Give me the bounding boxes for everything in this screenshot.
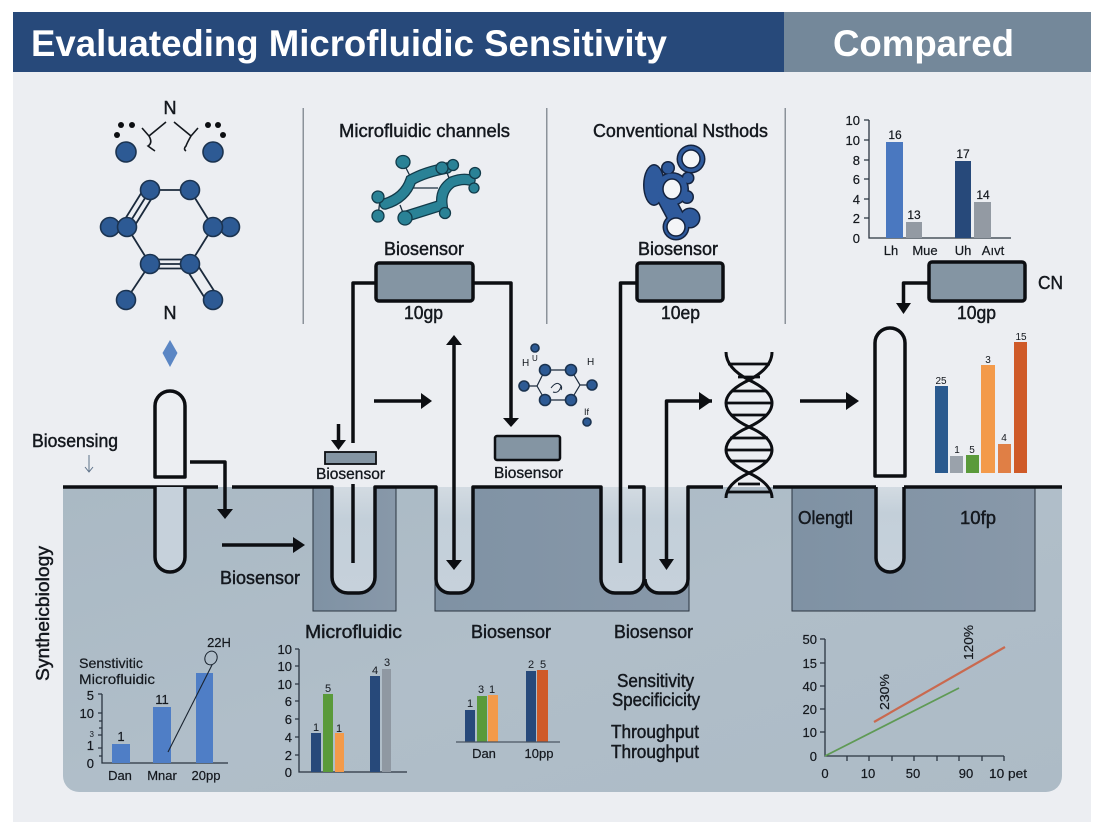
component: biosensor box one xyxy=(376,239,473,323)
bar chart: right middle: 3 xyxy=(985,355,991,366)
label: Biosensor xyxy=(638,239,718,259)
small molecule: If xyxy=(584,407,590,417)
arrow: box one right xyxy=(473,283,519,427)
bottom chart 2: 2 xyxy=(285,748,292,763)
capsule: right lower xyxy=(876,487,904,572)
top right bar chart: 4 xyxy=(853,192,860,207)
well: middle block xyxy=(435,488,689,611)
component: small sensor xyxy=(316,424,386,483)
arrow: to left well xyxy=(222,537,305,553)
green series xyxy=(825,688,959,756)
component: sensor block xyxy=(494,436,564,482)
line chart: 40 xyxy=(803,679,817,694)
bottom chart 1: 1 xyxy=(87,738,94,753)
bottom chart 1: Dan xyxy=(108,768,132,783)
line chart: 15 xyxy=(803,656,817,671)
heading: biosensor metrics: Biosensor xyxy=(614,622,693,642)
bottom chart 1: 1 xyxy=(117,729,125,744)
bottom chart 1: 0 xyxy=(87,756,94,771)
line chart: 10 xyxy=(861,766,875,781)
line chart: 20 xyxy=(803,702,817,717)
bottom chart 1 xyxy=(79,635,231,783)
chart heading line 2: Microfluidic xyxy=(79,671,155,687)
arrow: double headed xyxy=(446,335,462,570)
red series xyxy=(874,647,1005,722)
chart heading: Biosensor xyxy=(471,622,551,642)
bottom chart 2: 6 xyxy=(285,712,292,727)
bottom chart 1: 10 xyxy=(80,706,94,721)
top right bar chart: 13 xyxy=(907,208,921,222)
label: biosensing: Biosensing xyxy=(32,431,118,451)
bottom chart 3: 1 xyxy=(489,684,495,696)
component: biosensor box two xyxy=(637,239,723,323)
header banner xyxy=(13,12,1091,72)
arrow: channel up to DNA xyxy=(659,392,712,570)
small molecule: H xyxy=(587,357,594,368)
bottom chart 3: 3 xyxy=(478,684,484,696)
capsule: right upper xyxy=(875,328,905,476)
text block: metrics: Sensitivity xyxy=(617,671,694,691)
well: right block xyxy=(792,488,1035,611)
icon: blue folded molecule xyxy=(643,144,706,240)
top right bar chart: Aıvt xyxy=(982,243,1005,258)
bottom chart 3: 5 xyxy=(540,659,546,671)
arrow: top right box to capsule xyxy=(896,283,929,314)
icon: DNA helix xyxy=(726,352,772,498)
arrow: DNA to capsule xyxy=(800,392,859,410)
bar chart: right middle: 15 xyxy=(1015,332,1027,343)
text block: metrics xyxy=(611,671,700,762)
top right bar chart: 2 xyxy=(853,211,860,226)
bottom chart 2: 5 xyxy=(325,683,331,695)
bar chart: right middle xyxy=(935,332,1027,473)
text block: metrics: Throughput xyxy=(611,722,699,742)
label: N top: N xyxy=(164,98,176,118)
label: CN: CN xyxy=(1038,273,1063,293)
bottom chart 3: 10pp xyxy=(525,746,553,761)
bottom chart 1: 20pp xyxy=(192,768,220,783)
top right bar chart: 0 xyxy=(853,231,860,246)
line chart: 0 xyxy=(821,766,829,781)
bottom chart 2: 1 xyxy=(313,722,319,734)
label: rotated synthetic biology: Syntheicbiology xyxy=(33,546,53,681)
text block: metrics: Throughput xyxy=(611,742,699,762)
line chart: 230% xyxy=(877,674,892,710)
top right bar chart: 6 xyxy=(853,172,860,187)
chart heading: Senstivitic xyxy=(79,655,143,671)
value: 10gp xyxy=(404,303,443,323)
top right bar chart: Lh xyxy=(884,243,898,258)
top right bar chart: 10 xyxy=(846,133,860,148)
bar chart: right middle: 1 xyxy=(954,445,960,456)
value: 10ep xyxy=(661,303,700,323)
top right bar chart: 17 xyxy=(956,147,970,161)
bottom chart 3 xyxy=(456,622,560,761)
probe line xyxy=(351,484,355,563)
title: compared: Compared xyxy=(833,23,1014,64)
icon: teal channel molecule xyxy=(372,156,480,225)
line chart: 90 xyxy=(959,766,973,781)
label: Biosensor xyxy=(384,239,464,259)
line chart: 10 pet xyxy=(989,766,1027,781)
line chart: 120% xyxy=(961,625,976,660)
heading: microfluidic channels: Microfluidic channels xyxy=(339,121,510,141)
line chart xyxy=(803,625,1027,781)
bottom chart 3: 2 xyxy=(528,659,534,671)
well: left block xyxy=(313,488,396,611)
panel: lower substrate xyxy=(63,487,1062,792)
label: olengtl: Olengtl xyxy=(798,508,853,528)
bottom chart 2: 10 xyxy=(278,677,292,692)
line chart: 10 xyxy=(803,725,817,740)
label: biosensing xyxy=(32,431,118,472)
line chart: 50 xyxy=(803,632,817,647)
top right bar chart xyxy=(846,113,1011,258)
title: Evaluateding Microfluidic Sensitivity xyxy=(31,23,667,64)
top right bar chart: 14 xyxy=(976,188,990,202)
bottom chart 2: 10 xyxy=(278,659,292,674)
bottom chart 2: 0 xyxy=(285,765,292,780)
bar chart: right middle: 25 xyxy=(935,376,947,387)
bottom chart 1: 5 xyxy=(87,688,94,703)
chart heading: Microfluidic xyxy=(305,622,402,642)
top right bar chart: Uh xyxy=(955,243,971,258)
bottom chart 2: 10 xyxy=(278,642,292,657)
capsule: left lower xyxy=(155,487,185,572)
bottom chart 2: 3 xyxy=(384,657,390,669)
microfluidic channels and ground line xyxy=(63,487,1062,593)
label: Biosensor xyxy=(316,466,386,483)
top right bar chart: 8 xyxy=(853,153,860,168)
bottom chart 2 xyxy=(278,622,407,780)
bottom chart 2: 6 xyxy=(285,694,292,709)
text block: metrics: Specificicity xyxy=(612,690,700,710)
top right bar chart: Mue xyxy=(912,243,938,258)
connector: box two to channel xyxy=(620,283,637,563)
bottom chart 1: 11 xyxy=(155,692,169,707)
label: N bottom: N xyxy=(164,303,176,323)
label: biosensor substrate: Biosensor xyxy=(220,568,300,588)
arrow: horizontal mid xyxy=(374,393,432,409)
label: 10fp: 10fp xyxy=(960,508,996,528)
line chart: 0 xyxy=(810,749,817,764)
arrow down xyxy=(337,424,340,442)
bar chart: right middle: 5 xyxy=(969,445,975,456)
bar chart: right middle: 4 xyxy=(1001,433,1007,444)
capsule: left upper xyxy=(155,391,185,477)
bottom chart 3: 1 xyxy=(467,698,473,710)
connector: box one left xyxy=(353,283,376,443)
top right bar chart: 16 xyxy=(888,128,902,142)
heading: conventional methods: Conventional Nsthods xyxy=(593,121,768,141)
small molecule: H xyxy=(522,358,529,369)
bottom chart 3: Dan xyxy=(472,746,496,761)
bottom chart 1: Mnar xyxy=(147,768,177,783)
icon: diamond xyxy=(162,340,178,367)
molecule: hexagon structure xyxy=(100,180,240,323)
molecule: upper fragment xyxy=(114,98,226,162)
bottom chart 1: 3 xyxy=(90,730,95,739)
bottom chart 2: 4 xyxy=(285,730,292,745)
small molecule: U xyxy=(532,354,538,363)
small molecule xyxy=(519,344,597,426)
component: top right box xyxy=(929,262,1063,323)
bottom chart 2: 4 xyxy=(372,665,378,677)
line chart: 50 xyxy=(906,766,920,781)
bottom chart 1: 22H xyxy=(207,635,231,650)
label: Biosensor xyxy=(494,465,564,482)
bottom chart 2: 1 xyxy=(336,723,342,735)
arrow: capsule to substrate xyxy=(190,462,233,519)
top right bar chart: 10 xyxy=(846,113,860,128)
value: 10gp xyxy=(957,303,996,323)
